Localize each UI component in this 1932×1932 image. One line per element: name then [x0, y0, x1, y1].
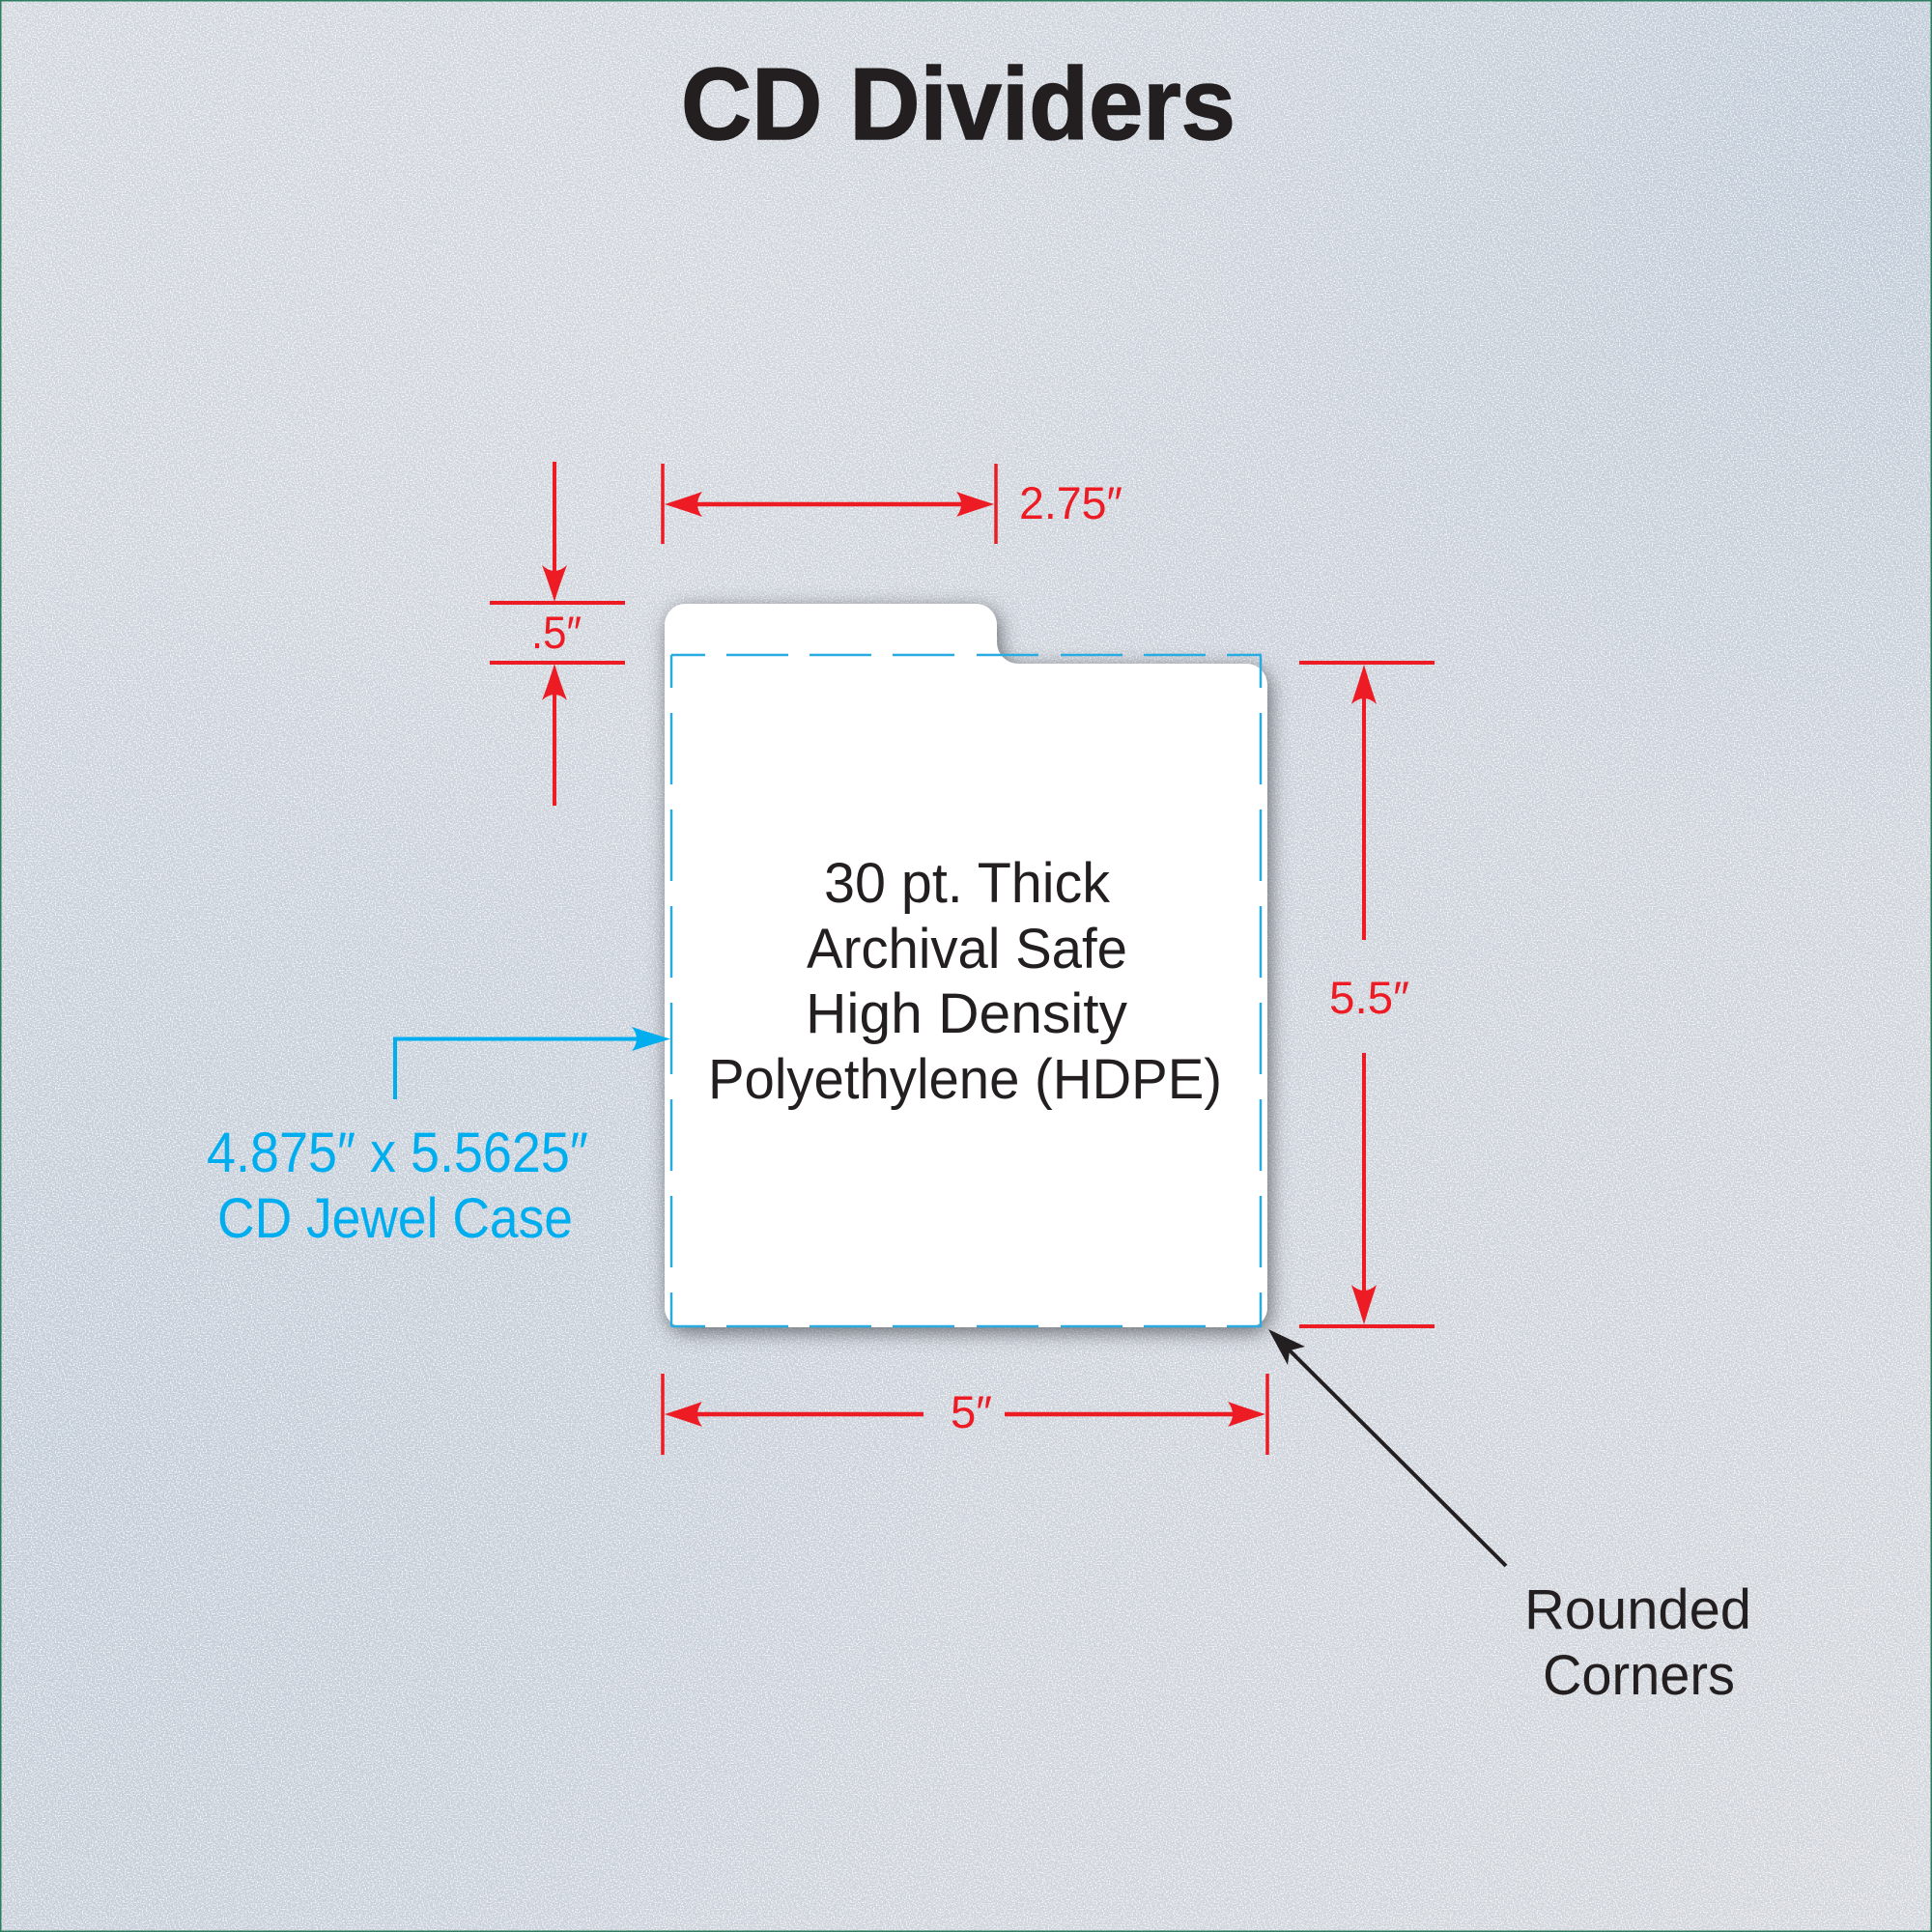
dimension: tab height .5 inch: .5″: [531, 607, 582, 658]
dimension: height 5.5 inches: 5.5″: [1329, 972, 1409, 1023]
card material text: High Density: [806, 982, 1127, 1045]
card material text: Archival Safe: [807, 918, 1127, 980]
callout: rounded corners: [1268, 1329, 1751, 1707]
callout: rounded corners: Corners: [1543, 1644, 1735, 1707]
dimension: width 5 inches: [663, 1374, 1267, 1455]
dimension: width 5 inches: 5″: [951, 1386, 992, 1437]
title: CD Dividers: [681, 47, 1236, 161]
panel: CD divider card with tab: [665, 604, 1267, 1327]
card material text: [708, 852, 1222, 1111]
card material text: Polyethylene (HDPE): [708, 1048, 1222, 1111]
card material text: 30 pt. Thick: [824, 852, 1111, 915]
callout: CD jewel case size: 4.875″ x 5.5625″: [207, 1122, 588, 1184]
callout: rounded corners: Rounded: [1524, 1578, 1751, 1641]
jewel case dashed outline: [671, 655, 1262, 1326]
dimension: height 5.5 inches: [1299, 663, 1435, 1326]
callout: CD jewel case size: CD Jewel Case: [217, 1187, 573, 1250]
dimension: tab width 2.75 inches: [663, 464, 1122, 544]
callout: CD jewel case size: [207, 1027, 670, 1250]
dimension: tab width 2.75 inches: 2.75″: [1019, 477, 1122, 528]
dimension: tab height .5 inch: [490, 462, 625, 806]
